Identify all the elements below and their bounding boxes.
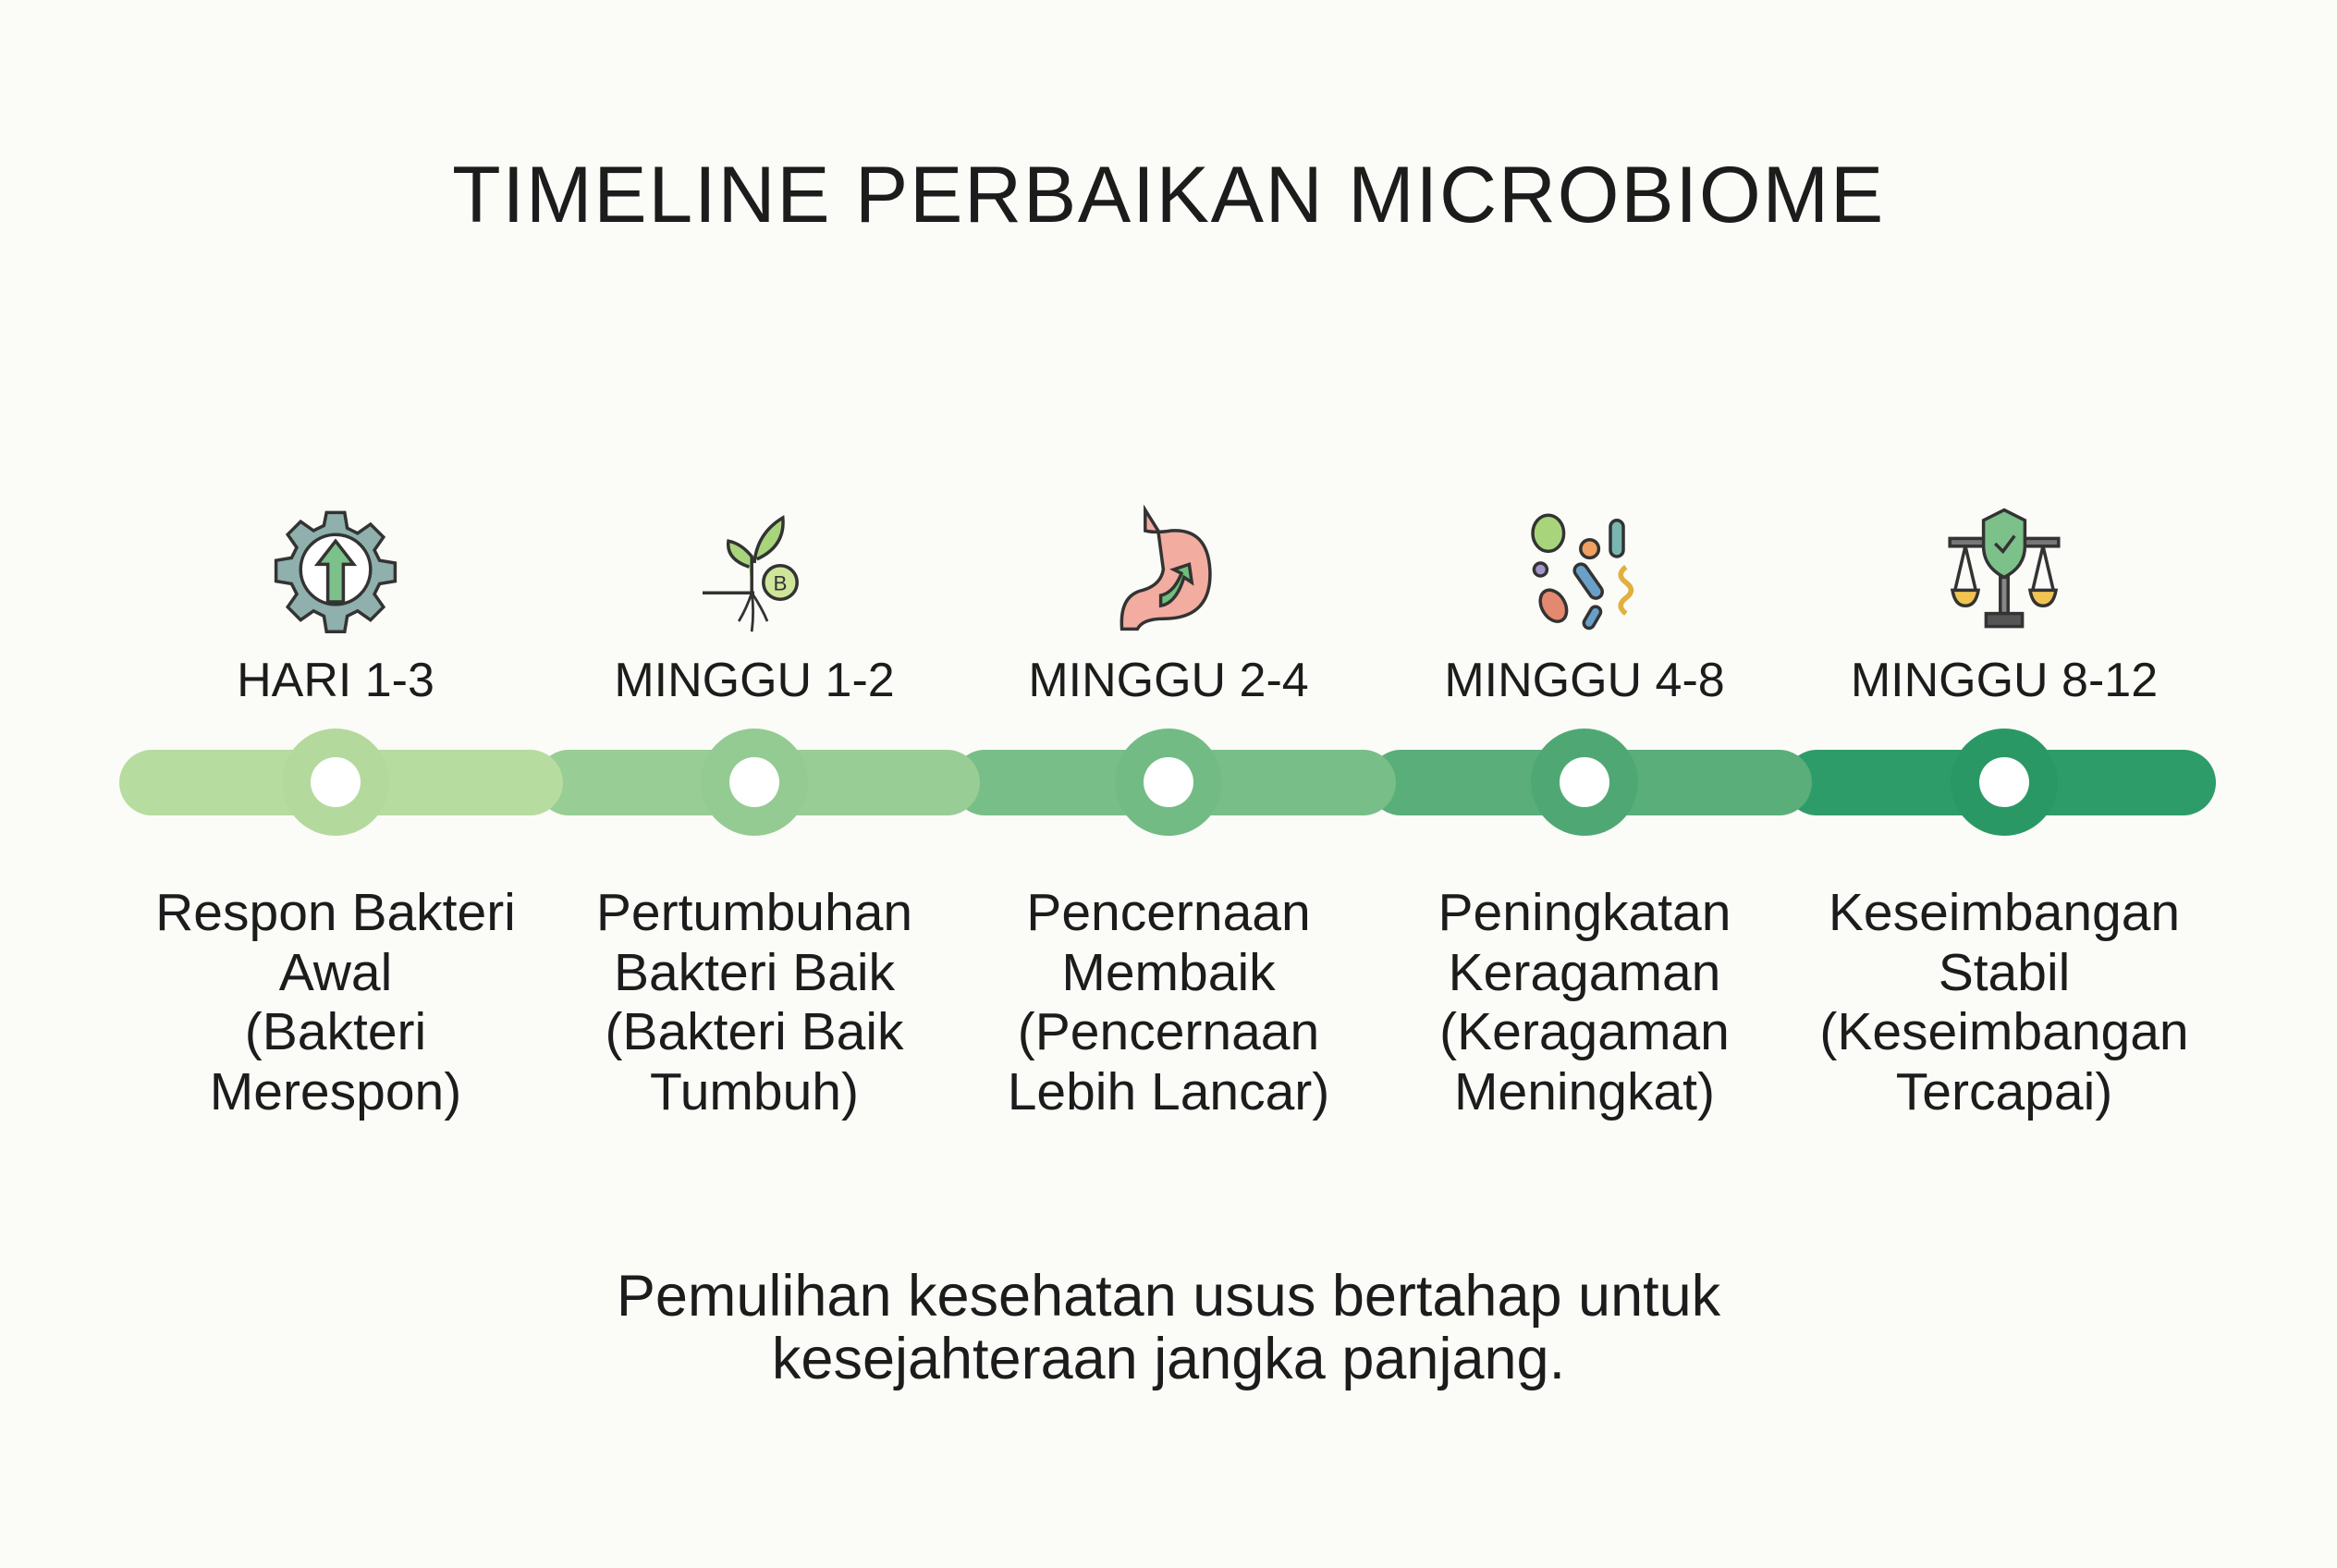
description 4: (Keragaman bbox=[1439, 1002, 1730, 1061]
label: minggu 4-8: MINGGU 4-8 bbox=[1444, 654, 1725, 707]
description 1 bbox=[155, 883, 516, 1121]
footer text: kesejahteraan jangka panjang. bbox=[772, 1327, 1565, 1391]
description 3: Lebih Lancar) bbox=[1008, 1061, 1329, 1121]
description 5: Stabil bbox=[1939, 943, 2070, 1002]
description 1: (Bakteri bbox=[245, 1002, 426, 1061]
icon: sprout with B bbox=[703, 515, 799, 632]
description 5 bbox=[1819, 883, 2189, 1121]
description 2: Bakteri Baik bbox=[614, 943, 895, 1002]
description 5: (Keseimbangan bbox=[1819, 1002, 2189, 1061]
icon: gear with arrow bbox=[274, 510, 398, 633]
label: minggu 1-2: MINGGU 1-2 bbox=[614, 654, 895, 707]
label: hari 1-3: HARI 1-3 bbox=[237, 654, 434, 707]
title: TIMELINE PERBAIKAN MICROBIOME bbox=[452, 151, 1885, 239]
icon: stomach bbox=[1120, 505, 1212, 631]
icon: balance scale with shield bbox=[1948, 508, 2061, 629]
icon: sprout with B: B bbox=[774, 571, 787, 594]
description 4 bbox=[1438, 883, 1731, 1121]
node 5 bbox=[1951, 729, 2058, 836]
description 3 bbox=[1008, 883, 1329, 1121]
description 3: Pencernaan bbox=[1026, 883, 1311, 942]
description 3: (Pencernaan bbox=[1018, 1002, 1319, 1061]
footer text bbox=[617, 1264, 1721, 1391]
description 3: Membaik bbox=[1061, 943, 1276, 1002]
label: minggu 8-12: MINGGU 8-12 bbox=[1851, 654, 2158, 707]
description 2: Pertumbuhan bbox=[596, 883, 912, 942]
description 1: Awal bbox=[279, 943, 392, 1002]
description 4: Peningkatan bbox=[1438, 883, 1731, 942]
description 5: Keseimbangan bbox=[1829, 883, 2180, 942]
description 2 bbox=[596, 883, 912, 1121]
description 2: (Bakteri Baik bbox=[605, 1002, 904, 1061]
icon: bacteria bbox=[1531, 514, 1634, 631]
footer text: Pemulihan kesehatan usus bertahap untuk bbox=[617, 1264, 1720, 1329]
node 2 bbox=[701, 729, 808, 836]
description 2: Tumbuh) bbox=[650, 1061, 859, 1121]
label: minggu 2-4: MINGGU 2-4 bbox=[1028, 654, 1309, 707]
node 3 bbox=[1115, 729, 1222, 836]
node 4 bbox=[1531, 729, 1638, 836]
timeline bar bbox=[119, 729, 2216, 836]
description 1: Merespon) bbox=[210, 1061, 461, 1121]
description 4: Meningkat) bbox=[1454, 1061, 1715, 1121]
description 4: Keragaman bbox=[1449, 943, 1720, 1002]
description 5: Tercapai) bbox=[1896, 1061, 2112, 1121]
node 1 bbox=[282, 729, 389, 836]
description 1: Respon Bakteri bbox=[155, 883, 516, 942]
